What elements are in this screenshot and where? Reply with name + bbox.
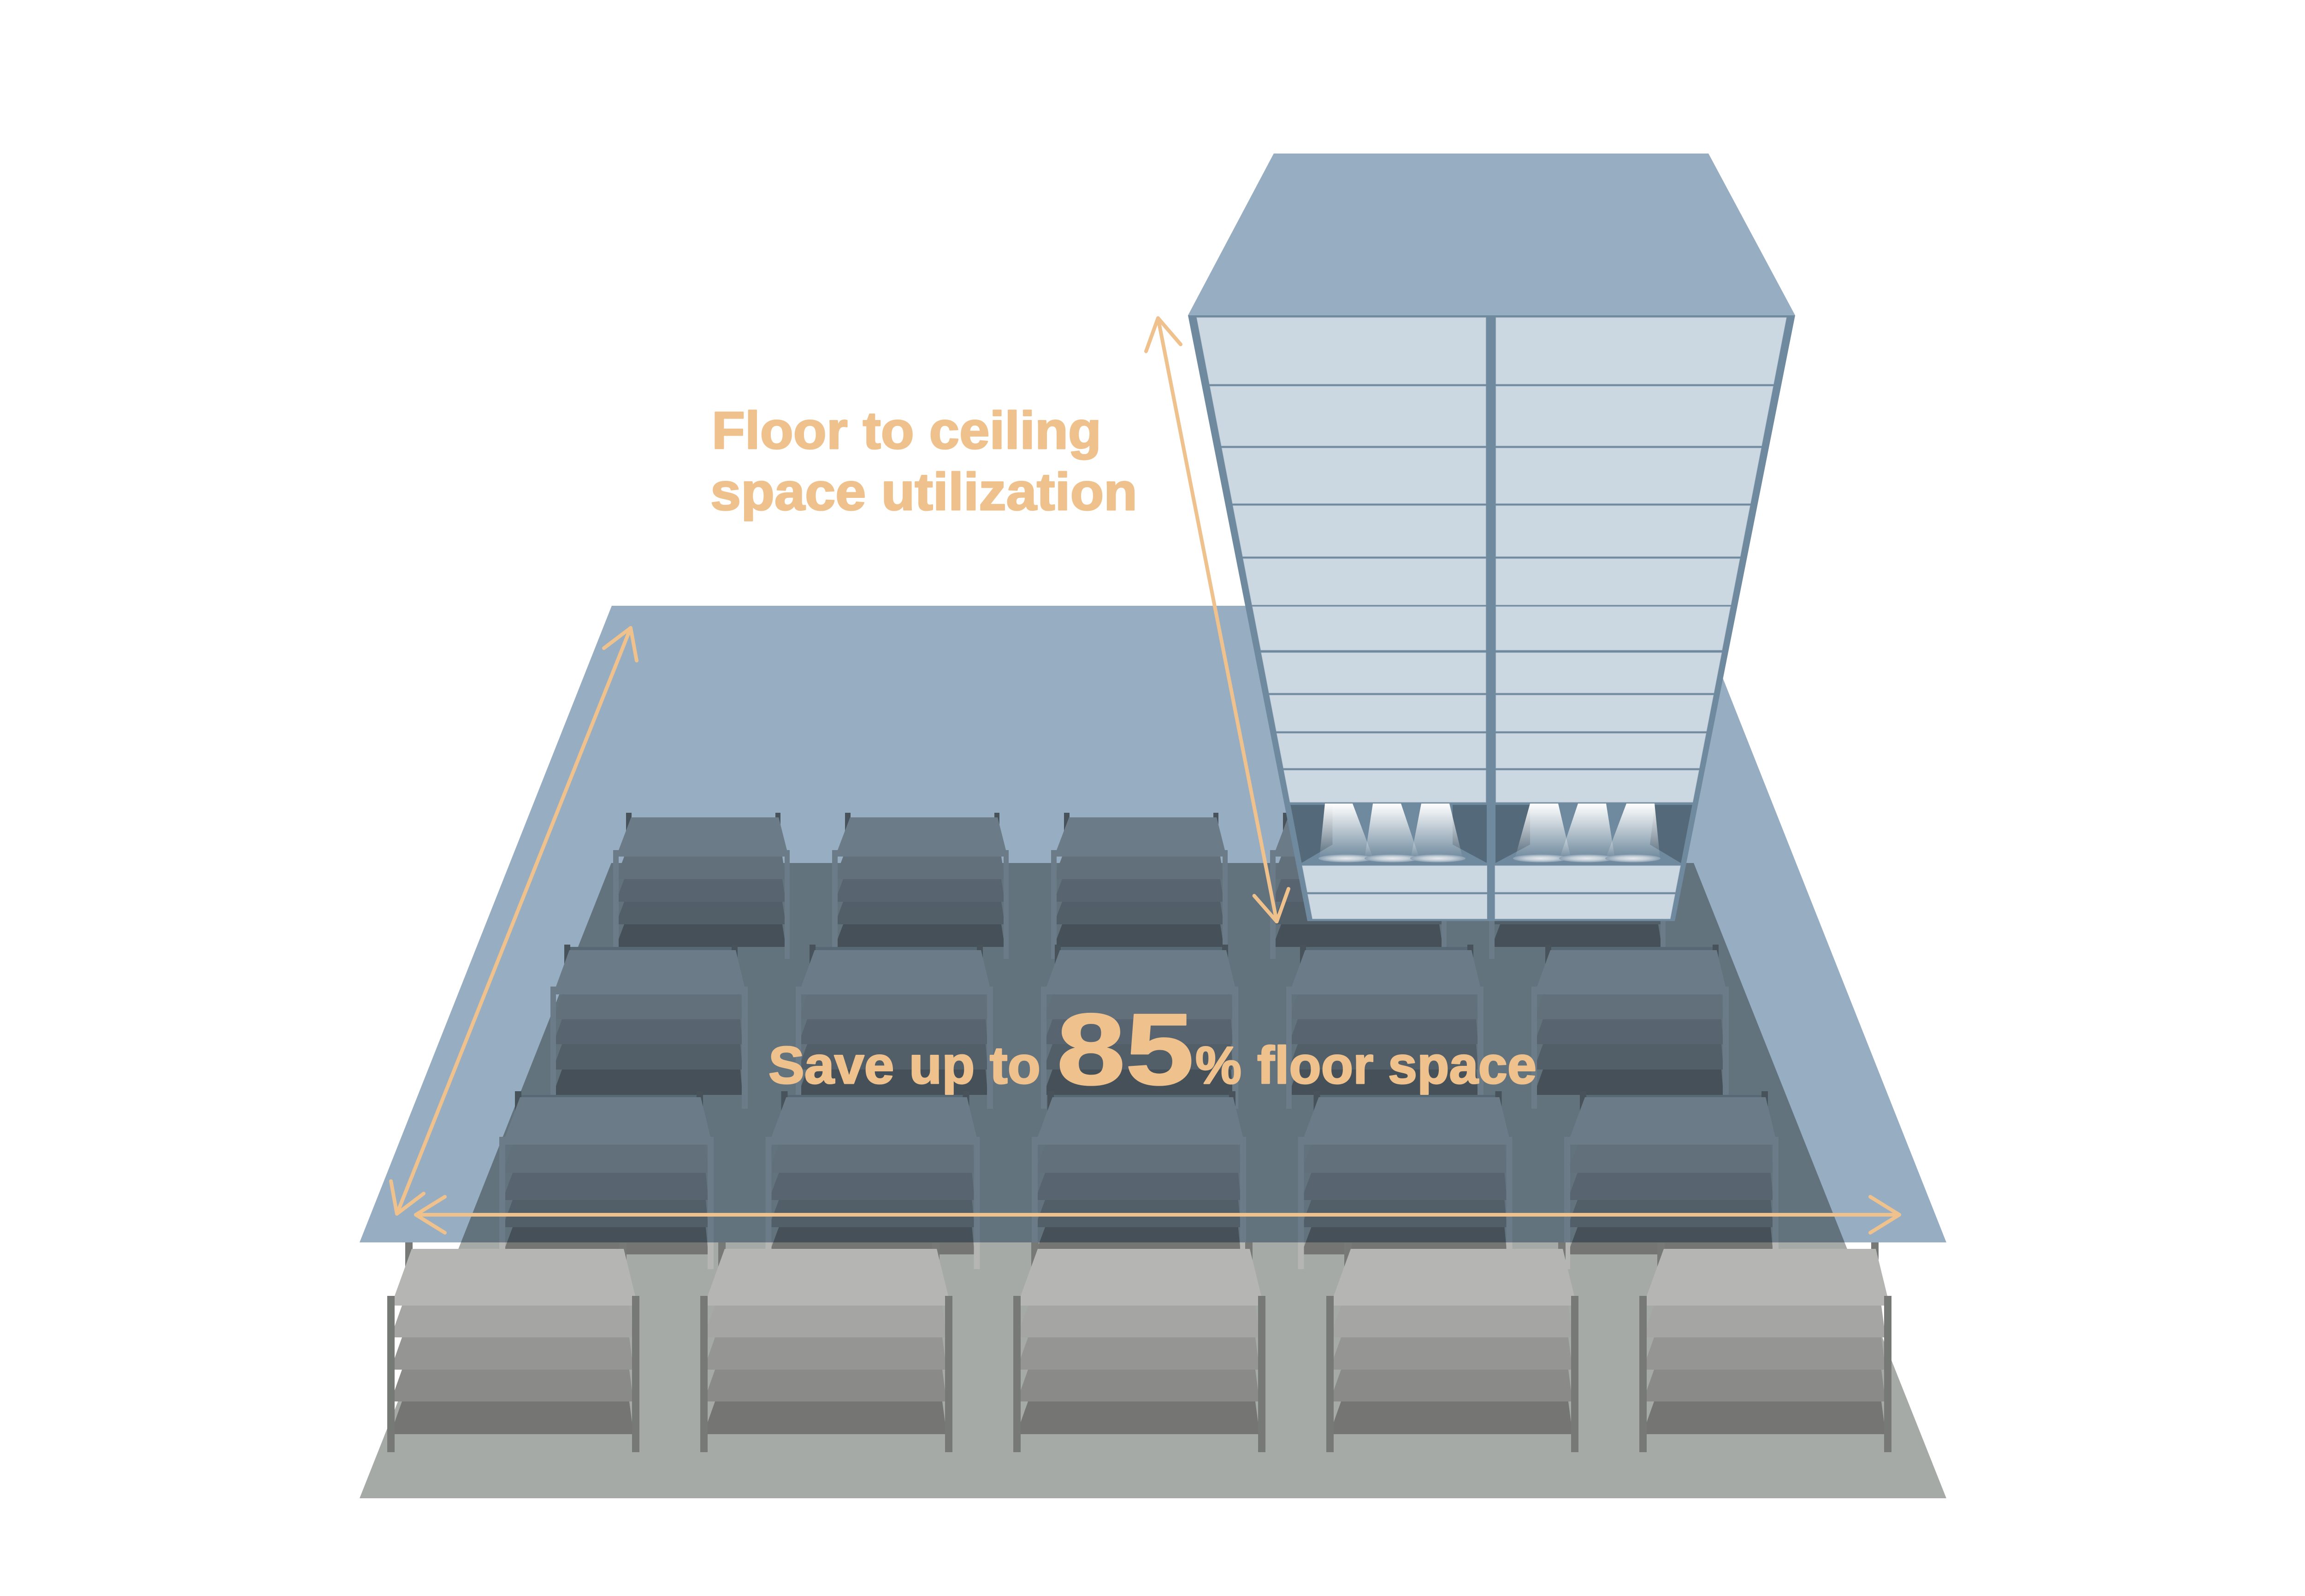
callout: save up to 85% floor space: floor space	[1257, 1036, 1537, 1095]
shelf row 4 (front)	[387, 1242, 1891, 1452]
tower open bay: right side with lights	[1495, 804, 1692, 863]
tower open bay: left side with lights	[1291, 804, 1487, 863]
shelf row 3	[499, 1091, 1779, 1269]
tower right shelf panels	[1495, 318, 1786, 919]
arrow: tower height	[1146, 318, 1288, 922]
heading: floor to ceiling: Floor to ceiling	[712, 402, 1101, 460]
blue floor footprint overlay	[360, 606, 1946, 1242]
floor plane	[360, 863, 1946, 1498]
tower left shelf panels	[1197, 318, 1487, 919]
callout: save up to 85% floor space: 85	[1057, 993, 1194, 1106]
vertical storage tower	[1188, 154, 1795, 921]
arrow: floor width	[416, 1197, 1899, 1233]
callout: save up to 85% floor space: Save up to	[768, 1036, 1040, 1095]
tower frame	[1188, 315, 1795, 921]
shelf row 2	[550, 945, 1729, 1109]
tower roof plate	[1188, 154, 1795, 315]
callout: save up to 85% floor space: %	[1195, 1036, 1241, 1095]
arrow: floor depth	[391, 628, 637, 1214]
heading: floor to ceiling: space utilization	[710, 463, 1137, 521]
shelf row 1 (back)	[613, 813, 1666, 959]
callout: save up to 85% floor space	[768, 993, 1537, 1106]
storage scene: conventional floor with shelves	[360, 813, 1946, 1498]
heading: floor to ceiling	[710, 402, 1137, 521]
